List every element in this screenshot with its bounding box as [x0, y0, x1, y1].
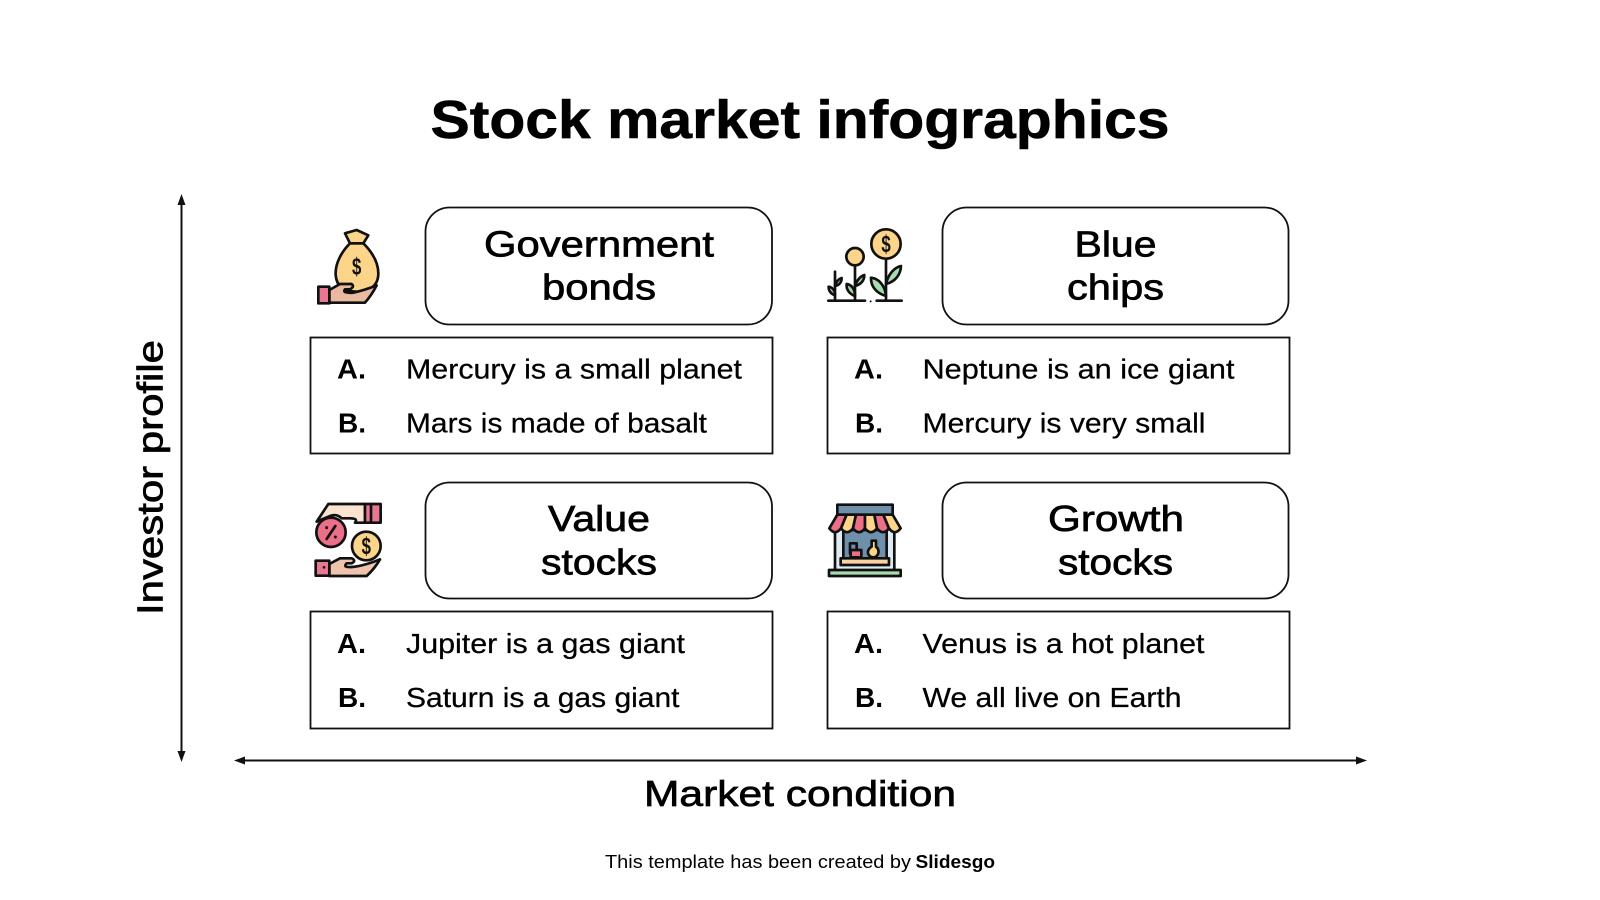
list: value stocks: A.	[337, 628, 366, 659]
icon: storefront	[829, 505, 901, 576]
icon: money bag in hand	[318, 230, 378, 303]
list: value stocks: Jupiter is a gas giant	[406, 628, 685, 659]
list: value stocks: Saturn is a gas giant	[406, 682, 680, 713]
heading box: value stocks: stocks	[541, 542, 657, 582]
panel: growth stocks	[828, 482, 1290, 728]
icon: money bag in hand: $	[352, 254, 361, 281]
heading box: government bonds	[426, 208, 772, 324]
heading box: growth stocks: stocks	[1058, 542, 1173, 582]
list: value stocks	[310, 612, 772, 728]
list: government bonds: Mercury is a small planet	[406, 354, 742, 384]
list: government bonds	[310, 338, 772, 454]
list: government bonds: B.	[338, 408, 366, 438]
icon: hands exchanging coins	[316, 504, 381, 576]
icon: growing coin plants: $	[881, 231, 891, 258]
title: Stock market infographics	[430, 90, 1170, 150]
icon: growing coin plants	[828, 229, 902, 302]
list: blue chips	[828, 338, 1290, 454]
heading box: growth stocks	[942, 482, 1288, 598]
list: government bonds: Mars is made of basalt	[406, 408, 707, 438]
footer credit: Slidesgo	[916, 852, 995, 872]
list: blue chips: Mercury is very small	[922, 408, 1206, 438]
axis label: investor profile: Investor profile	[130, 340, 170, 615]
panel: government bonds	[310, 208, 772, 454]
heading box: government bonds: Government	[484, 224, 714, 264]
heading box: blue chips: chips	[1067, 266, 1164, 308]
list: government bonds: A.	[337, 354, 366, 384]
icon: hands exchanging coins: $	[362, 533, 371, 560]
heading box: value stocks: Value	[548, 498, 650, 539]
heading box: blue chips	[942, 208, 1288, 324]
footer credit: This template has been created by	[605, 852, 911, 872]
panel: value stocks	[310, 482, 772, 728]
list: value stocks: B.	[338, 682, 366, 713]
list: growth stocks: B.	[855, 682, 883, 713]
list: blue chips: B.	[855, 408, 883, 438]
heading box: government bonds: bonds	[542, 266, 656, 308]
panel: blue chips	[828, 208, 1290, 454]
arrow: investor profile axis	[178, 194, 186, 762]
list: growth stocks: A.	[854, 628, 883, 659]
list: growth stocks: Venus is a hot planet	[922, 628, 1205, 659]
list: blue chips: A.	[854, 354, 883, 384]
heading box: blue chips: Blue	[1074, 224, 1156, 264]
list: growth stocks: We all live on Earth	[922, 682, 1182, 713]
axis label: market condition: Market condition	[644, 773, 956, 814]
heading box: growth stocks: Growth	[1048, 498, 1184, 539]
list: growth stocks	[828, 612, 1290, 728]
arrow: market condition axis	[234, 756, 1367, 764]
list: blue chips: Neptune is an ice giant	[922, 354, 1235, 384]
heading box: value stocks	[426, 482, 772, 598]
